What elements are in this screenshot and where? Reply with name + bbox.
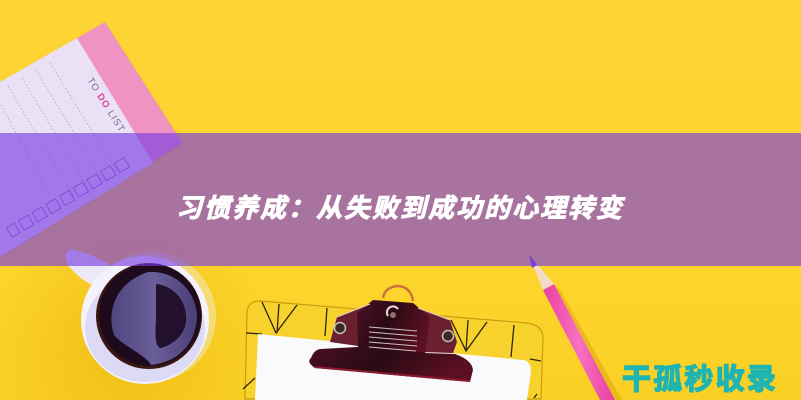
dotted list lines	[1, 63, 122, 218]
metal clip	[309, 286, 473, 382]
warm shading around the cup	[0, 205, 270, 400]
title band	[0, 133, 801, 266]
paper sheet	[255, 334, 531, 400]
coffee cup	[65, 249, 216, 384]
checkbox row	[6, 157, 130, 237]
clipboard black lines	[243, 302, 541, 398]
watermark: 干孤秒收录	[622, 363, 778, 396]
notepad label: TO DO LIST	[84, 76, 127, 135]
title text: 习惯养成：从失败到成功的心理转变	[176, 193, 626, 223]
to-do list notepad	[0, 22, 184, 259]
clipboard	[243, 286, 543, 400]
pencil	[529, 254, 622, 400]
clip engraved lines	[369, 327, 417, 351]
